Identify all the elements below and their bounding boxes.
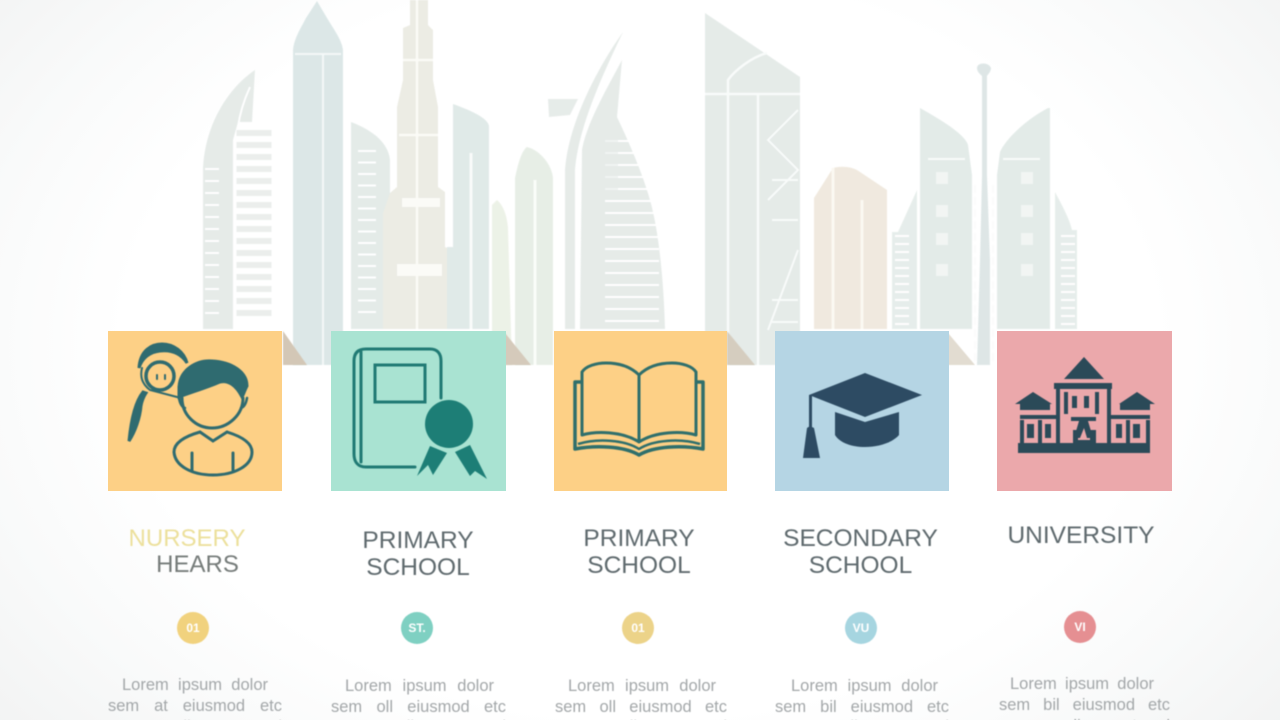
card: book icon [554, 331, 727, 491]
heading: primary school: SCHOOL [587, 552, 691, 579]
badge: university: VI [1074, 620, 1086, 634]
heading: university: UNIVERSITY [1007, 522, 1155, 549]
icon: university building [1014, 356, 1156, 454]
heading: secondary school: SECONDARY [783, 525, 938, 552]
heading: nursery years: NURSERY [129, 525, 245, 552]
text: primary description: sem oll eiusmod etc [331, 698, 506, 716]
text: primary description: Lorem ipsum dolor [568, 677, 716, 695]
building: needle tower [975, 64, 993, 365]
text: university description [999, 675, 1170, 720]
badge: primary: 01 [631, 621, 645, 635]
icon: open book [572, 360, 706, 458]
badge: nursery: 01 [186, 621, 200, 635]
building: tall angular tower [705, 13, 800, 365]
icon: two children [126, 342, 254, 478]
text: primary description [555, 677, 727, 720]
heading: primary school: PRIMARY [362, 527, 474, 554]
text: primary description [331, 677, 506, 720]
building: sail tower [565, 32, 665, 329]
building: peach tower [814, 167, 887, 329]
building: central spire [383, 0, 452, 329]
heading: nursery years: HEARS [156, 551, 239, 578]
building: left twin tower [920, 108, 972, 329]
panel: primary school one [331, 331, 506, 720]
card: nursery icon [108, 331, 282, 491]
building: notched tower [447, 104, 489, 329]
badge: primary: ST. [408, 621, 426, 635]
text: primary description: Lorem ipsum dolor [345, 677, 494, 695]
panel: primary school two [554, 331, 727, 720]
badge: nursery [177, 612, 209, 644]
card: university icon [997, 331, 1172, 491]
heading: secondary school [783, 525, 938, 579]
icon: distant flag [548, 99, 578, 117]
text: nursery description: sem at eiusmod etc [108, 697, 282, 715]
text: nursery description [108, 676, 282, 720]
text: university description: sem bil eiusmod etc [999, 696, 1170, 714]
heading: primary school: PRIMARY [583, 525, 695, 552]
badge: primary [401, 612, 433, 644]
building: small left wing [892, 190, 917, 329]
text: primary description: sem oll eiusmod etc [555, 698, 727, 716]
badge: primary [622, 612, 654, 644]
card: certificate icon [331, 331, 506, 491]
building: curved striped tower [351, 122, 390, 329]
badge: university [1064, 611, 1096, 643]
icon: graduation cap [802, 372, 922, 459]
building: right twin tower [997, 108, 1050, 329]
heading: primary school: SCHOOL [366, 554, 470, 581]
panel: nursery years [108, 331, 282, 720]
panel: secondary school [775, 331, 949, 720]
panel: university [997, 331, 1172, 720]
badge: secondary [845, 612, 877, 644]
building: tall blue tower [293, 1, 343, 365]
heading: secondary school: SCHOOL [809, 552, 912, 579]
heading: primary school [583, 525, 695, 579]
text: nursery description: Lorem ipsum dolor [122, 676, 268, 694]
building: small green towers [492, 147, 553, 365]
card fold shadows [282, 331, 975, 366]
building: small right wing [1055, 192, 1077, 329]
text: university description: Lorem ipsum dolor [1010, 675, 1154, 693]
text: secondary description: Lorem ipsum dolor [791, 677, 938, 695]
text: secondary description [775, 677, 949, 720]
building: left crescent tower [203, 70, 255, 329]
heading: nursery years [129, 525, 246, 578]
card: graduation cap icon [775, 331, 949, 491]
heading: primary school [362, 527, 474, 581]
icon: certificate with medal [352, 346, 488, 480]
text: secondary description: sem bil eiusmod etc [775, 698, 949, 716]
city skyline background [202, 0, 1077, 366]
badge: secondary: VU [853, 621, 869, 635]
